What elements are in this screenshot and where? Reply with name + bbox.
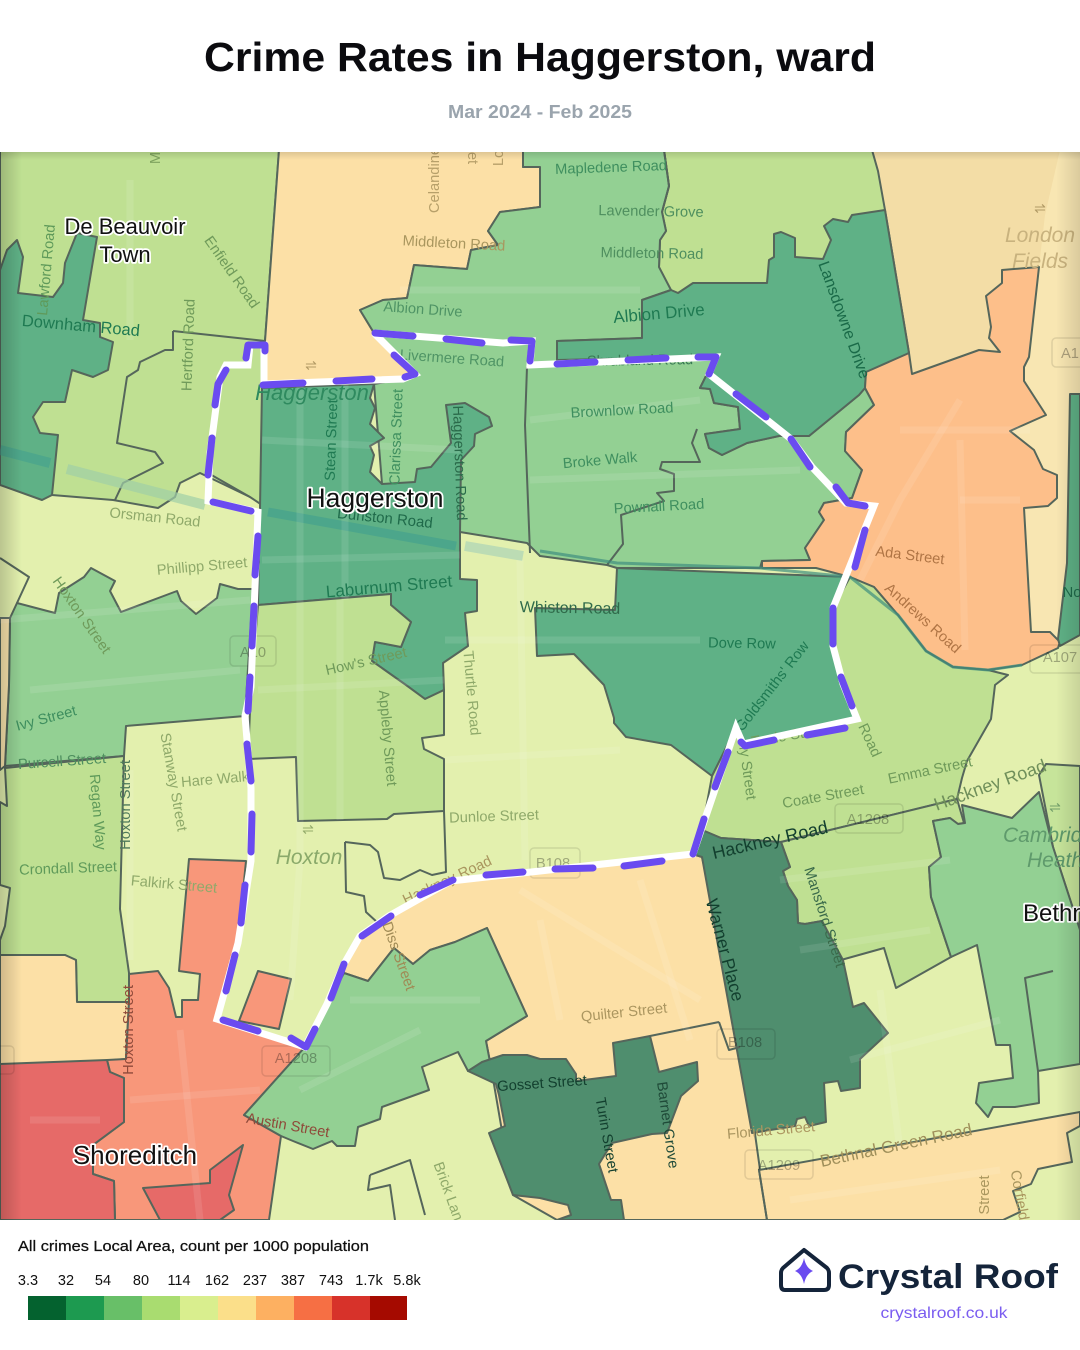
- street labels: Livermere Road: [399, 347, 505, 371]
- street labels: et: [464, 152, 480, 164]
- street labels: Thurtle Road: [459, 650, 483, 736]
- street labels: Broke Walk: [562, 450, 639, 472]
- street labels: Clarissa Street: [387, 389, 407, 485]
- place names: Town: [99, 242, 151, 267]
- road number labels: B108: [536, 856, 570, 872]
- title: Crime Rates in Haggerston, ward: [204, 34, 876, 80]
- road number labels: [240, 346, 1079, 1174]
- street labels: Austin Street: [245, 1111, 331, 1141]
- street labels: Hoxton Street: [121, 985, 137, 1075]
- street labels: Crondall Street: [19, 859, 117, 879]
- street labels: Dunloe Street: [449, 807, 539, 827]
- legend values: 3.3: [18, 1273, 38, 1289]
- italic area names: Fields: [1012, 250, 1069, 273]
- legend values: 32: [58, 1273, 74, 1289]
- map edge shading: [0, 152, 1080, 1220]
- street labels: Falkirk Street: [130, 873, 218, 897]
- icon: house with star: [781, 1250, 829, 1290]
- street labels: Hoxton Street: [49, 574, 113, 657]
- street labels: Whiston Road: [520, 599, 620, 618]
- street labels: Hare Walk: [181, 769, 250, 791]
- street labels: Dunston Road: [336, 505, 434, 532]
- place names: Shoreditch: [73, 1140, 197, 1170]
- ward boundary: white line: [208, 333, 874, 1047]
- street labels: Street: [977, 1175, 993, 1215]
- street labels: Lo: [491, 150, 507, 166]
- road number labels: A1: [1061, 346, 1079, 362]
- street labels: Ivy Street: [14, 703, 78, 735]
- street labels: Lawford Road: [35, 224, 59, 316]
- canal: [0, 450, 1022, 670]
- street labels: Albion Drive: [612, 300, 705, 327]
- street labels: Purcell Street: [18, 751, 107, 773]
- legend values: 54: [95, 1273, 111, 1289]
- street labels: M: [148, 152, 164, 164]
- road number labels: A107: [1043, 650, 1077, 666]
- street labels: Quilter Street: [580, 1001, 668, 1025]
- street labels: Barnet Grove: [653, 1081, 681, 1170]
- ward boundary: purple dashes: [208, 333, 865, 1047]
- street labels: Diss Street: [378, 920, 418, 993]
- street labels: Warner Place: [702, 897, 748, 1003]
- street labels: Hoxton Street: [118, 760, 134, 850]
- legend values: 5.8k: [393, 1273, 421, 1289]
- station symbols: ⇌: [1049, 799, 1061, 815]
- legend values: 162: [205, 1273, 229, 1289]
- street labels: Appleby Street: [375, 689, 399, 787]
- road number labels: A1208: [275, 1051, 317, 1067]
- street labels: Enfield Road: [201, 234, 262, 312]
- street network: [0, 180, 1030, 1220]
- street labels: Emma Street: [887, 754, 974, 788]
- street labels: Hertford Road: [179, 299, 199, 391]
- street labels: [14, 147, 1080, 1231]
- road number labels: A1208: [847, 812, 889, 828]
- street labels: Lansdowne Drive: [814, 259, 873, 381]
- street labels: Brownlow Road: [570, 400, 674, 422]
- place names: Haggerston: [306, 483, 444, 513]
- street labels: Florida Street: [726, 1119, 816, 1143]
- crime rate zones: [0, 150, 1080, 1220]
- street labels: Hackney Road: [400, 853, 494, 909]
- street labels: Brick Lane: [430, 1160, 468, 1231]
- street labels: Orsman Road: [109, 505, 201, 531]
- street labels: Laburnum Street: [325, 571, 453, 601]
- station symbols: [302, 200, 1061, 837]
- street labels: Hackney Road: [710, 817, 830, 863]
- place names: [64, 214, 1080, 1170]
- logo url: crystalroof.co.uk: [880, 1305, 1009, 1322]
- street labels: ly Street: [735, 745, 759, 801]
- street labels: Mansford Street: [800, 865, 848, 969]
- road number badges: [0, 338, 1080, 1179]
- legend values: 80: [133, 1273, 149, 1289]
- street labels: How's Street: [324, 645, 408, 679]
- street labels: Goldsmiths' Row: [733, 638, 813, 735]
- place names: De Beauvoir: [64, 214, 186, 239]
- street labels: Teale Street: [750, 721, 830, 751]
- station symbols: ⇌: [305, 357, 317, 373]
- street labels: Gosset Street: [497, 1073, 587, 1095]
- italic area names: Haggerston: [255, 380, 369, 405]
- legend values: 114: [167, 1273, 191, 1289]
- italic area names: [255, 224, 1080, 872]
- legend values: [18, 1273, 421, 1289]
- street labels: Road: [854, 721, 884, 760]
- street labels: Turin Street: [592, 1096, 621, 1174]
- subtitle: date range: Mar 2024 - Feb 2025: [448, 102, 632, 122]
- street labels: Andrews Road: [881, 581, 963, 657]
- legend values: 1.7k: [355, 1273, 383, 1289]
- street labels: Haggerston Road: [449, 405, 469, 521]
- street labels: Phillipp Street: [156, 555, 248, 579]
- legend colour scale: [28, 1296, 407, 1320]
- street labels: Lavender Grove: [598, 203, 704, 221]
- street labels: Middleton Road: [402, 233, 506, 255]
- street labels: Regan Way: [86, 773, 108, 851]
- italic area names: Hoxton: [276, 846, 342, 869]
- legend title: All crimes Local Area, count per 1000 population: [18, 1239, 369, 1255]
- station symbols: ⇌: [302, 821, 314, 837]
- street labels: Stean Street: [323, 399, 341, 481]
- zone boundary lines: [0, 150, 1053, 1220]
- road number labels: A1209: [758, 1158, 800, 1174]
- street labels: Bethnal Green Road: [818, 1120, 974, 1171]
- street labels: Ada Street: [874, 544, 945, 568]
- street labels: Mapledene Road: [555, 158, 667, 178]
- legend values: 743: [319, 1273, 343, 1289]
- logo: [781, 1250, 1059, 1322]
- road number labels: B108: [728, 1035, 762, 1051]
- logo wordmark: Crystal Roof: [838, 1258, 1059, 1296]
- street labels: Downham Road: [21, 312, 141, 340]
- legend values: 387: [281, 1273, 305, 1289]
- street labels: Middleton Road: [600, 245, 704, 263]
- street labels: Pownall Road: [613, 497, 705, 517]
- road number labels: A10: [240, 645, 266, 661]
- street labels: Celandine: [427, 147, 443, 213]
- street labels: Dove Row: [708, 635, 776, 653]
- italic area names: London: [1005, 224, 1075, 247]
- street labels: Shrubland Road: [587, 352, 693, 370]
- street labels: Stanway Street: [156, 732, 190, 833]
- legend: [18, 1239, 421, 1320]
- street labels: Corfield: [1007, 1169, 1031, 1221]
- legend values: 237: [243, 1273, 267, 1289]
- station symbols: ⇌: [1034, 200, 1046, 216]
- street labels: Hackney Road: [931, 755, 1049, 815]
- street labels: Albion Drive: [383, 299, 463, 321]
- street labels: Coate Street: [781, 782, 865, 812]
